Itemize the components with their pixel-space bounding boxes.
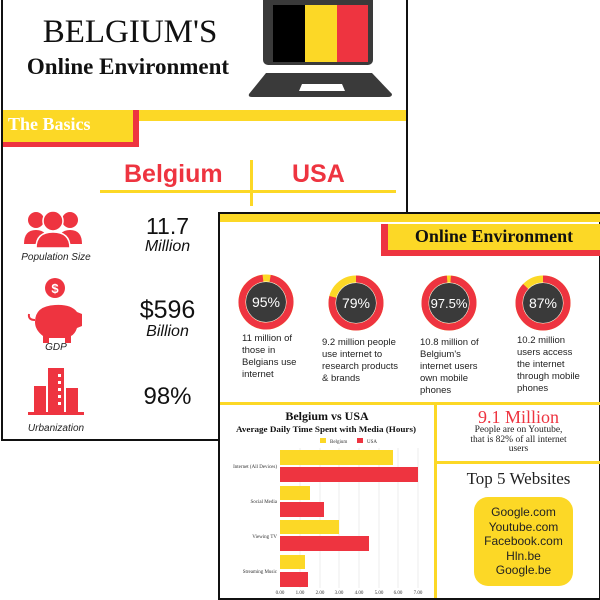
donut captions: those in: [242, 345, 275, 356]
value: population: 11.7: [146, 213, 189, 239]
subtitle: Online Environment: [27, 54, 229, 79]
value: gdp: Billion: [146, 323, 189, 340]
bar chart: USA: [367, 440, 377, 445]
donut captions: 11 million of: [242, 333, 292, 344]
bar chart: [233, 409, 423, 596]
column headers: [100, 160, 396, 206]
donut captions: users access: [517, 347, 572, 358]
bar chart: 4.00: [355, 591, 364, 596]
value: gdp: $596: [140, 296, 195, 324]
donut 97.5%: 97.5%: [431, 296, 468, 311]
bar chart: 5.00: [375, 591, 384, 596]
list: top websites: Hln.be: [506, 548, 541, 562]
heading: online environment: [381, 224, 600, 256]
dividers: [220, 402, 600, 405]
label: gdp: GDP: [45, 342, 67, 353]
bar chart: Streaming Music: [243, 570, 278, 575]
yellow top band: [220, 214, 600, 222]
donut captions: research products: [322, 361, 398, 372]
title: BELGIUM'S: [43, 14, 217, 50]
heading: top 5 websites: Top 5 Websites: [467, 469, 570, 488]
icon: population: [24, 212, 82, 248]
donut 95%: [238, 274, 294, 330]
list: top websites: Youtube.com: [489, 520, 558, 534]
panel: back (the basics): [1, 0, 408, 441]
donut captions: internet users: [420, 361, 478, 372]
bar chart: Belgium vs USA: [285, 409, 369, 423]
bar chart: 6.00: [394, 591, 403, 596]
panel: online environment (front): [218, 212, 600, 600]
icon: laptop with belgian flag: [248, 0, 392, 97]
bar chart: 1.00: [296, 591, 305, 596]
icon: piggy bank: $: [51, 281, 59, 296]
column headers: USA: [292, 160, 345, 188]
donut captions: through mobile: [517, 371, 580, 382]
donut 97.5%: [423, 277, 475, 329]
donut 79%: [332, 279, 380, 327]
donut captions: use internet to: [322, 349, 382, 360]
callout: youtube: 9.1 Million: [478, 407, 559, 427]
list: top websites: Google.be: [496, 563, 551, 577]
bar chart: 0.00: [276, 591, 285, 596]
bar chart: Internet (All Devices): [233, 465, 277, 470]
donut captions: phones: [517, 383, 548, 394]
value: gdp: [140, 296, 195, 340]
label: population size: Population Size: [21, 252, 91, 263]
donut charts: [238, 274, 570, 330]
callout: youtube: users: [509, 444, 528, 454]
bar chart: Average Daily Time Spent with Media (Hours): [236, 425, 416, 434]
column headers: Belgium: [124, 160, 223, 188]
heading: the basics: [3, 110, 139, 147]
donut 87%: [519, 279, 567, 327]
donut 87%: 87%: [529, 295, 557, 311]
heading: online environment: Online Environment: [415, 226, 573, 246]
value: population: [145, 213, 190, 255]
label: urbanization: Urbanization: [28, 423, 84, 434]
icon: buildings: [28, 368, 84, 415]
callout: youtube: People are on Youtube,: [475, 425, 562, 435]
bar chart: Social Media: [250, 500, 278, 505]
bar chart: 7.00: [414, 591, 423, 596]
list: top websites: Facebook.com: [484, 534, 563, 548]
icon: piggy bank: [28, 278, 82, 343]
value: population: Million: [145, 238, 190, 255]
donut captions: & brands: [322, 373, 360, 384]
bar chart: 3.00: [335, 591, 344, 596]
callout: youtube: that is 82% of all internet: [470, 434, 567, 444]
donut 79%: 79%: [342, 295, 370, 311]
donut captions: Belgium's: [420, 349, 461, 360]
list: top websites: Google.com: [491, 505, 556, 519]
bar chart: 2.00: [316, 591, 325, 596]
bar chart: Belgium: [330, 440, 347, 445]
callout: youtube: [470, 407, 567, 454]
donut captions: 9.2 million people: [322, 337, 396, 348]
value: urbanization: 98%: [143, 383, 192, 410]
bar chart: Viewing TV: [252, 535, 277, 540]
donut captions: 10.2 million: [517, 335, 565, 346]
heading: the basics: The Basics: [8, 114, 91, 134]
yellow band: [3, 110, 406, 121]
donut captions: internet: [242, 369, 274, 380]
donut captions: 10.8 million of: [420, 337, 479, 348]
donut captions: phones: [420, 385, 451, 396]
donut captions: own mobile: [420, 373, 468, 384]
list: top websites: [474, 497, 573, 586]
donut captions: Belgians use: [242, 357, 296, 368]
donut captions: the internet: [517, 359, 565, 370]
donut 95%: 95%: [252, 294, 280, 310]
donut captions: [242, 333, 580, 396]
